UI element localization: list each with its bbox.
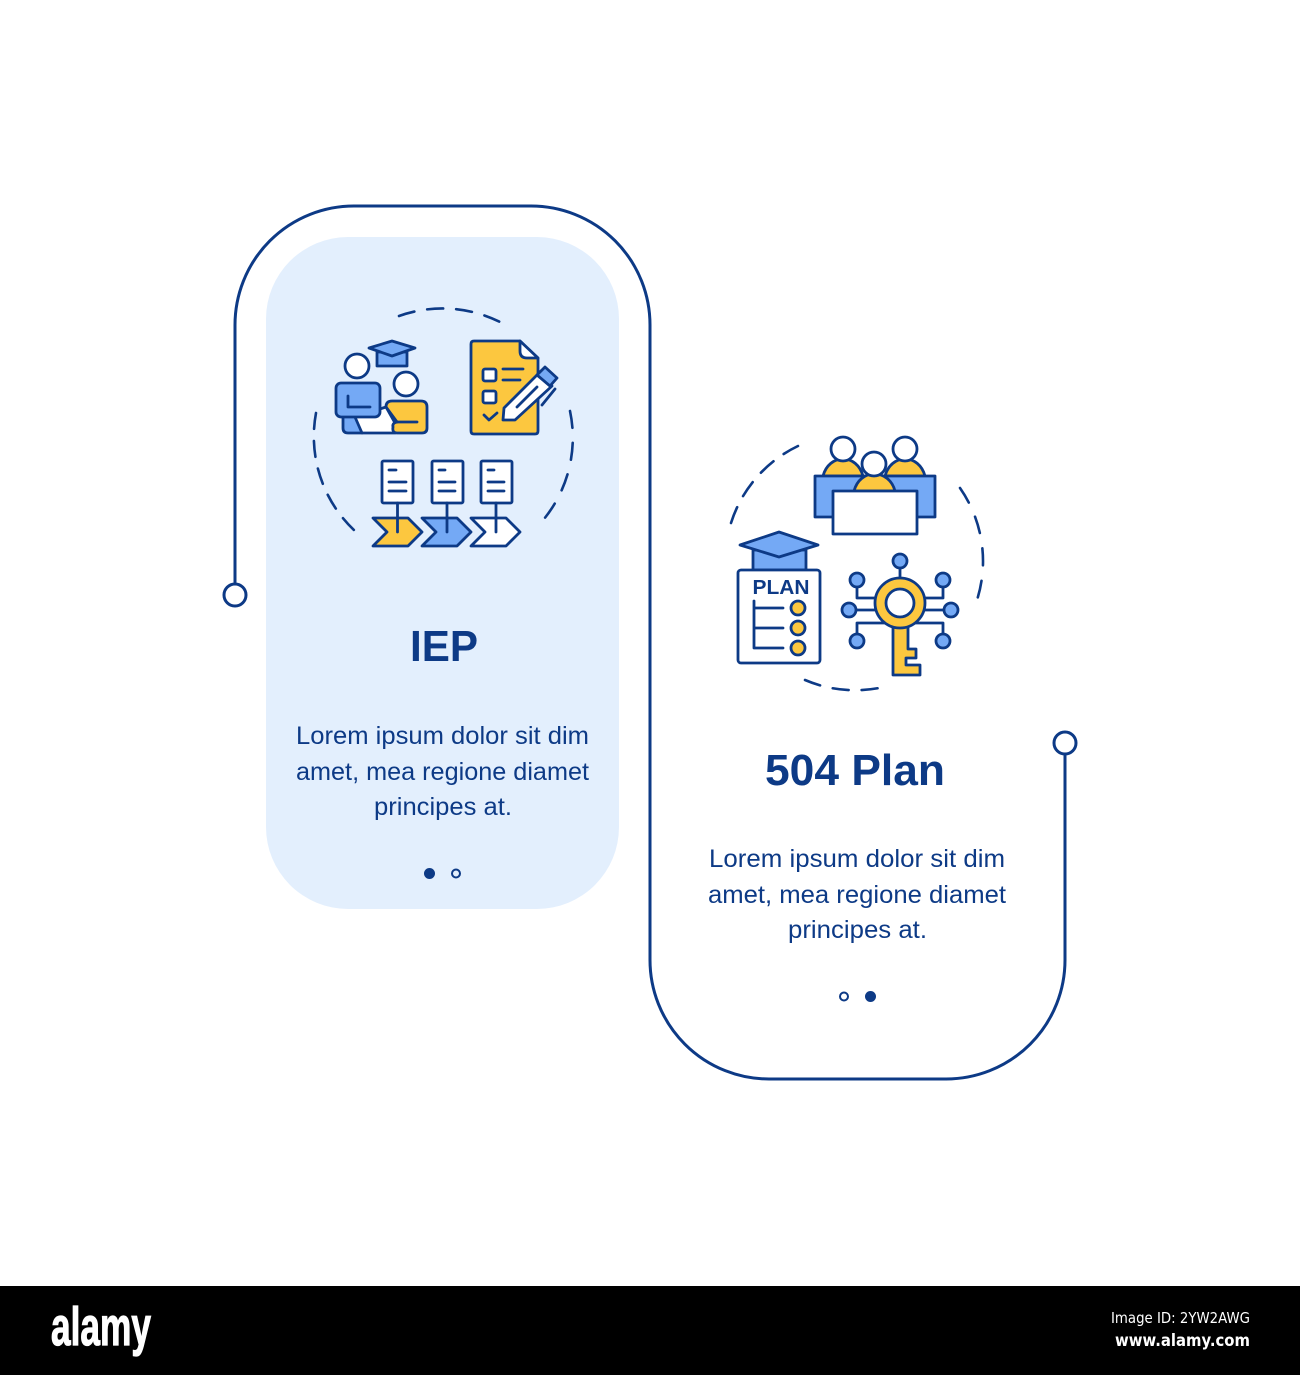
text block: 504 Plan description: principes at. bbox=[788, 916, 927, 944]
icon: committee at desk bbox=[815, 437, 935, 534]
label: PLAN: PLAN bbox=[752, 577, 810, 599]
icon: key with network nodes bbox=[842, 554, 958, 675]
text block: IEP description: amet, mea regione diamet bbox=[296, 758, 589, 786]
text block: 504 Plan description: amet, mea regione diamet bbox=[708, 881, 1006, 909]
panel: IEP background bbox=[266, 237, 619, 909]
icon: 504 Plan dashed ring bbox=[731, 446, 983, 690]
text block: 504 Plan description bbox=[708, 845, 1006, 944]
icon: document timeline bbox=[373, 461, 520, 546]
footer: website: www.alamy.com bbox=[1115, 1331, 1250, 1351]
icon: IEP dashed ring bbox=[314, 308, 573, 531]
heading: IEP: IEP bbox=[410, 622, 478, 671]
text block: IEP description: principes at. bbox=[374, 793, 512, 821]
footer logo: alamy: alamy bbox=[51, 1297, 151, 1357]
text block: IEP description: Lorem ipsum dolor sit dim bbox=[296, 722, 589, 750]
footer: image ID: Image ID: 2YW2AWG bbox=[1111, 1309, 1250, 1327]
icon: plan clipboard with cap bbox=[738, 532, 820, 663]
footer bar bbox=[0, 1286, 1300, 1375]
text block: IEP description bbox=[296, 722, 589, 821]
pagination dots: IEP bbox=[424, 868, 460, 879]
heading: 504 Plan: 504 Plan bbox=[765, 746, 945, 795]
text block: 504 Plan description: Lorem ipsum dolor sit dim bbox=[709, 845, 1005, 873]
icon: checklist document with pencil bbox=[471, 341, 557, 434]
connector outline bbox=[224, 206, 1076, 1079]
icon: student and teacher bbox=[336, 341, 427, 433]
pagination dots: 504 Plan bbox=[840, 991, 876, 1002]
